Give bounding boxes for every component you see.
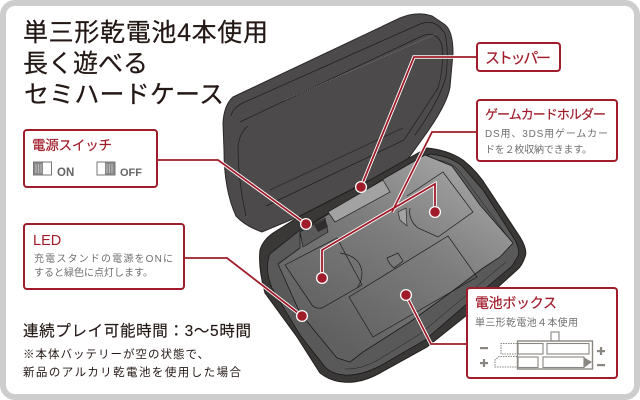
- callout: battery box: 単三形乾電池４本使用: [475, 316, 578, 329]
- callout: LED: LED: [33, 233, 61, 249]
- callout: power switch: 電源スイッチ: [32, 138, 112, 153]
- title: 単三形乾電池4本使用: [23, 19, 268, 47]
- case lid: [223, 14, 453, 232]
- callout: game card holder: ゲームカードホルダー: [485, 107, 606, 122]
- icon: battery diagram: [495, 332, 592, 369]
- title: 長く遊べる: [23, 50, 148, 78]
- callout: game card holder: ドを２枚収納できます。: [485, 143, 592, 156]
- play time text: [23, 322, 251, 379]
- play time text: ※本体バッテリーが空の状態で、: [23, 347, 209, 361]
- base rim band: [267, 154, 519, 375]
- illustration: open semi-hard case: [223, 14, 526, 382]
- callout: LED: すると緑色に点灯します。: [34, 266, 153, 279]
- left battery cover: [285, 238, 362, 308]
- title: セミハードケース: [24, 81, 224, 109]
- callout: game card holder: [477, 100, 617, 161]
- callout: power switch: OFF: [120, 167, 142, 179]
- leader dots: [297, 182, 440, 321]
- battery compartment cover: [349, 236, 477, 337]
- callout: battery box: [467, 288, 617, 378]
- leader lines: [157, 57, 477, 344]
- callout: game card holder: DS用、3DS用ゲームカー: [485, 128, 608, 140]
- callout: battery box: 電池ボックス: [475, 295, 557, 311]
- callout: stopper: ストッパー: [485, 50, 551, 67]
- callout: power switch: ON: [57, 167, 74, 179]
- callout: LED: [24, 224, 184, 289]
- callout: power switch: [24, 130, 157, 187]
- play time text: 新品のアルカリ乾電池を使用した場合: [23, 365, 242, 379]
- icon: switch on: [34, 162, 52, 175]
- right game card slot: [407, 172, 473, 237]
- case base: [260, 148, 526, 382]
- stopper: [328, 180, 390, 222]
- callout: LED: 充電スタンドの電源をONに: [34, 252, 173, 265]
- tab: [387, 253, 403, 268]
- battery polarity marks: [480, 347, 605, 367]
- icon: switch off: [97, 162, 115, 175]
- tray interior: [278, 155, 513, 362]
- title: [23, 19, 268, 109]
- play time text: 連続プレイ可能時間：3〜5時間: [23, 322, 251, 340]
- callout: stopper: [477, 43, 560, 71]
